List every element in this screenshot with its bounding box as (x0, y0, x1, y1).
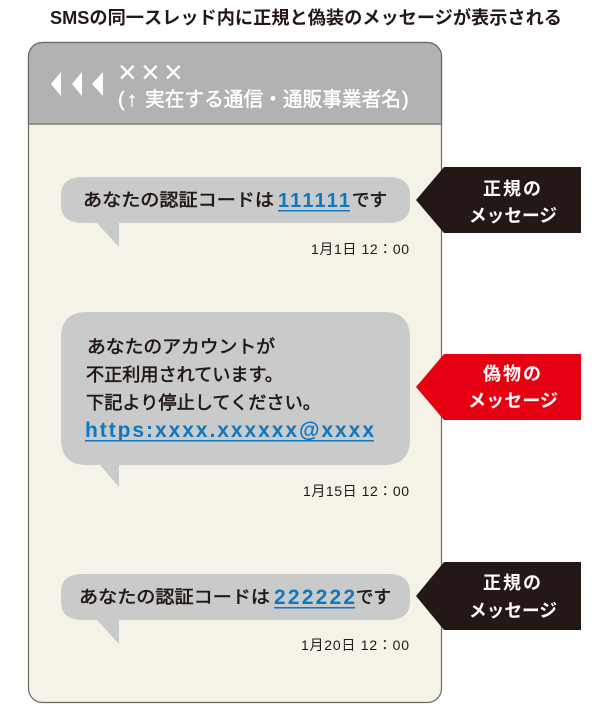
label: fake (416, 354, 581, 420)
link code: 222222 (274, 586, 355, 609)
label: legitimate 2 (416, 562, 581, 630)
icon: back arrows (51, 72, 103, 96)
message 1: legitimate: です (352, 190, 387, 210)
sender name: ( (118, 89, 125, 111)
sender name (118, 54, 409, 111)
fake link: https:xxxx.xxxxxx@xxxx (85, 419, 374, 442)
sender name: ) (402, 89, 409, 111)
label: legitimate 1: 正規の (483, 179, 541, 199)
message 1: legitimate (61, 177, 410, 257)
label: fake: メッセージ (468, 391, 558, 411)
sender name: ↑ (127, 89, 137, 111)
message 3: legitimate (61, 574, 410, 653)
phone header bar (28, 42, 442, 124)
panel: phone screen (28, 42, 442, 702)
message 2: fake: あなたのアカウントが (87, 337, 275, 357)
message 3: legitimate: あなたの認証コードは (79, 587, 270, 607)
message 3: legitimate: です (356, 587, 391, 607)
sender name: 実在する通信・通販事業者名 (145, 88, 401, 111)
message 1: legitimate: あなたの認証コードは (83, 190, 274, 210)
title: SMSの同一スレッド内に正規と偽装のメッセージが表示される (50, 7, 562, 28)
timestamp: 1月15日 12：00 (303, 483, 409, 499)
label: legitimate 1: メッセージ (469, 206, 557, 226)
link code: 111111 (278, 190, 350, 212)
label: fake: 偽物の (483, 364, 541, 384)
message 2: fake (61, 312, 410, 499)
label: legitimate 1 (416, 167, 581, 233)
message 2: fake: 不正利用されています。 (86, 365, 283, 385)
sender name: ××× (118, 54, 183, 90)
timestamp: 1月1日 12：00 (311, 241, 409, 257)
label: legitimate 2: メッセージ (469, 601, 557, 621)
label: legitimate 2: 正規の (483, 573, 541, 593)
message 2: fake: 下記より停止してください。 (86, 393, 321, 413)
timestamp: 1月20日 12：00 (301, 637, 409, 653)
